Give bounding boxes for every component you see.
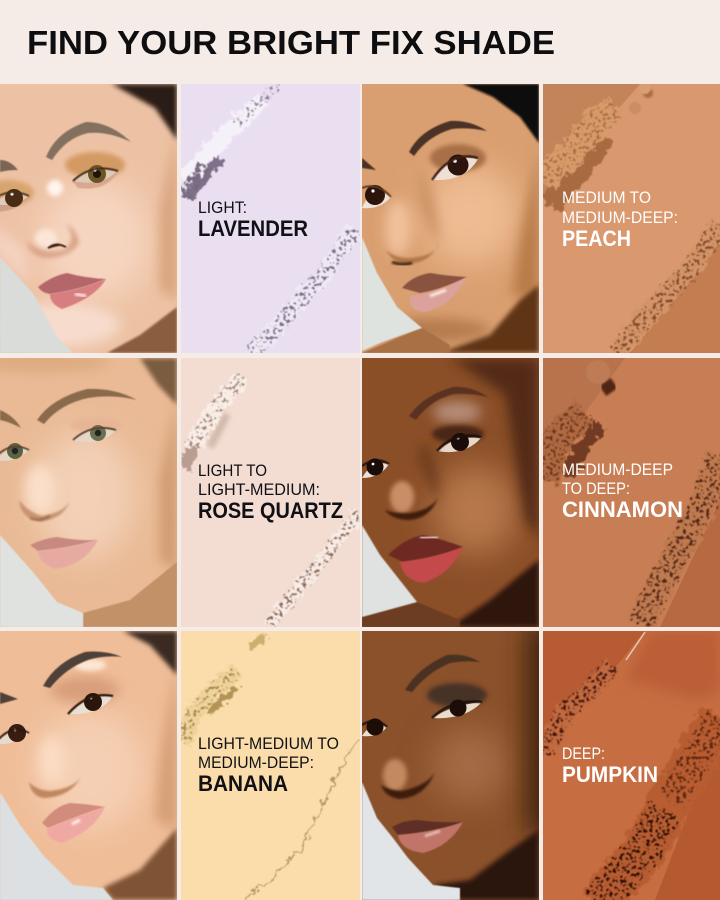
eye right — [68, 693, 113, 714]
swatch label: BANANA — [198, 771, 288, 796]
eye right — [432, 425, 484, 452]
panel: lavender swatch — [181, 84, 360, 353]
powder streak upper — [545, 632, 645, 752]
swatch label — [562, 744, 658, 787]
eye right — [432, 700, 482, 718]
hair — [463, 84, 539, 143]
lips — [42, 803, 105, 843]
panel: peach swatch — [541, 82, 720, 353]
powder streak upper — [184, 378, 243, 468]
eye right — [72, 420, 117, 442]
neck shadow — [107, 307, 177, 353]
background wedge — [0, 535, 83, 627]
eye left — [0, 180, 34, 212]
panel: face, deep model — [362, 625, 565, 900]
eye right — [430, 144, 486, 180]
eye left — [362, 185, 391, 208]
background wedge — [0, 257, 73, 353]
background wedge — [362, 525, 417, 617]
swatch label: MEDIUM-DEEP — [562, 460, 673, 479]
lips — [392, 820, 463, 853]
background wedge — [362, 237, 422, 351]
swatch label — [199, 202, 308, 236]
powder streak lower — [270, 512, 358, 625]
swatch label — [562, 460, 683, 522]
neck — [83, 562, 177, 627]
powder crack lower — [245, 740, 358, 900]
swatch label — [198, 734, 339, 796]
eye left — [362, 718, 387, 736]
powder streak lower — [640, 455, 720, 625]
powder streak lower — [617, 225, 720, 353]
hair — [140, 358, 177, 405]
lips — [30, 537, 98, 569]
lips — [388, 535, 463, 583]
hair — [112, 84, 177, 140]
eye left — [0, 443, 29, 461]
swatch label: CINNAMON — [562, 497, 683, 522]
hair — [123, 631, 177, 675]
title: FIND YOUR BRIGHT FIX SHADE — [27, 24, 555, 61]
neck — [433, 830, 539, 900]
swatch label: PEACH — [562, 226, 631, 251]
swatch label: TO DEEP: — [562, 479, 630, 498]
panel: face, medium model — [362, 84, 539, 353]
powder streak lower — [597, 718, 720, 900]
swatch label: LIGHT-MEDIUM: — [198, 480, 320, 499]
shoulder — [362, 602, 460, 627]
swatch label: MEDIUM-DEEP: — [198, 753, 314, 772]
powder streak upper — [184, 86, 278, 198]
swatch label — [563, 192, 677, 246]
powder streak lower — [252, 230, 355, 353]
swatch label: MEDIUM-DEEP: — [562, 208, 678, 227]
eye right — [65, 152, 125, 189]
panel: pumpkin swatch — [543, 631, 720, 900]
neck — [450, 560, 539, 627]
panel: rose quartz swatch — [181, 358, 360, 627]
swatch label: LAVENDER — [198, 216, 308, 241]
shoulder — [362, 328, 450, 353]
lips — [38, 273, 106, 309]
lips — [402, 273, 467, 312]
swatch label: LIGHT TO — [198, 461, 267, 480]
neck — [440, 285, 539, 353]
nose — [19, 464, 70, 522]
nose — [381, 759, 435, 799]
background wedge — [362, 782, 460, 900]
swatch label: LIGHT-MEDIUM TO — [198, 734, 339, 753]
powder streak upper — [541, 82, 653, 204]
nose — [29, 736, 82, 798]
eye left — [362, 458, 389, 478]
panel: cinnamon swatch — [543, 358, 720, 627]
powder streak upper — [545, 360, 612, 480]
swatch label: PUMPKIN — [562, 762, 658, 787]
nose — [27, 180, 79, 258]
nose — [385, 440, 438, 520]
brows — [43, 652, 122, 688]
nose — [385, 165, 439, 264]
panel: face, medium-deep to deep model — [362, 358, 539, 627]
panel: face, light to light-medium model — [0, 352, 177, 627]
brow — [409, 387, 488, 420]
swatch label: ROSE QUARTZ — [198, 498, 343, 523]
neck — [103, 828, 177, 900]
eye left — [0, 724, 29, 744]
panel: face, light-medium to medium-deep model — [0, 631, 177, 900]
brows — [46, 122, 131, 160]
brows — [37, 389, 137, 424]
brows — [409, 121, 487, 156]
swatch label — [198, 461, 343, 523]
brow — [405, 655, 480, 692]
swatch label: DEEP: — [562, 744, 605, 763]
background wedge — [0, 792, 113, 900]
powder streak upper — [183, 634, 268, 742]
panel: banana swatch — [181, 631, 360, 900]
swatch label: MEDIUM TO — [562, 188, 651, 207]
panel: face, light model — [0, 84, 177, 353]
swatch label: LIGHT: — [198, 198, 247, 217]
